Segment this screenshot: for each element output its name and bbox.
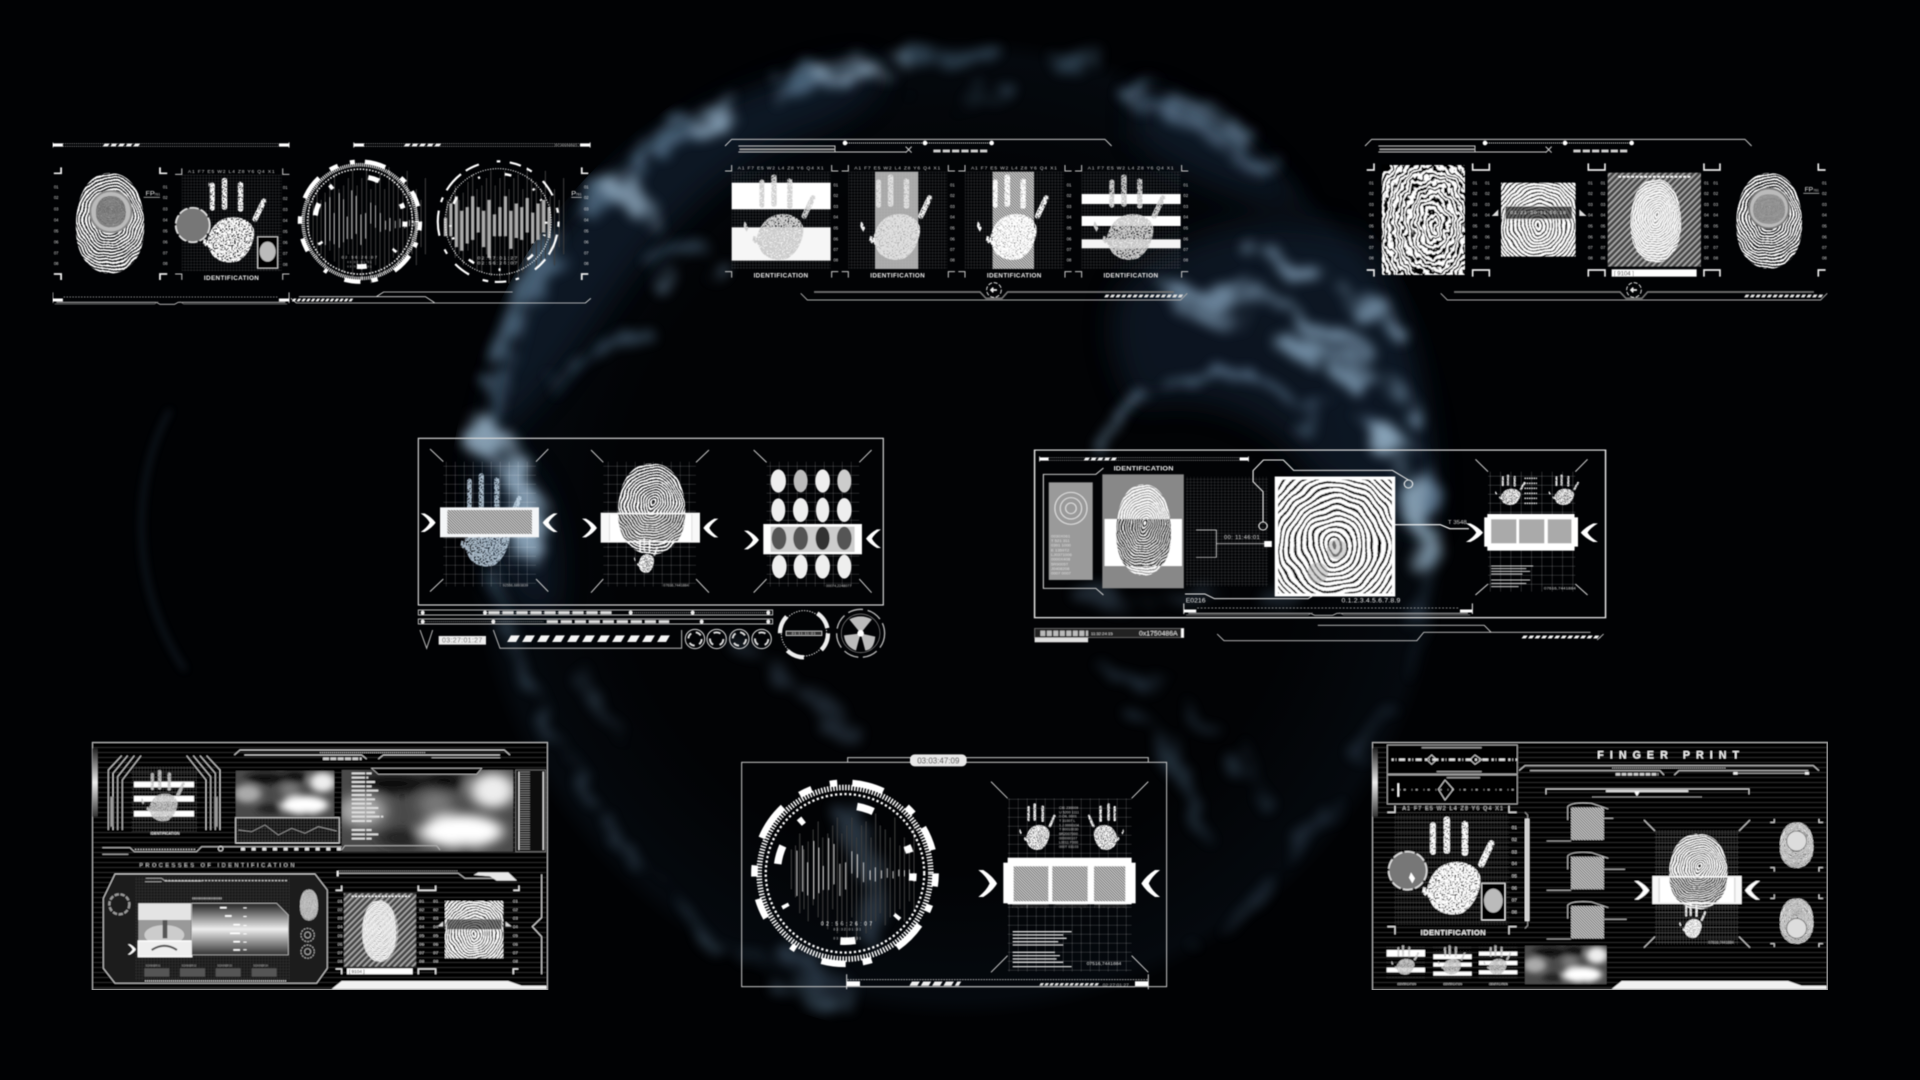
number columns [1369,180,1827,261]
scanner: palm: 92556,6893839 [503,584,528,588]
panel: processes of identification [92,742,548,990]
image panel [1523,946,1607,986]
fingerprint with lens: FP [1805,186,1814,193]
mini palm cells [1387,944,1517,986]
heading: IDENTIFICATION [1114,466,1174,472]
top frame [1365,139,1752,153]
scanner cell: 07616,7441884 [1544,586,1576,590]
waveform ring 1: 02:56:26:07 [341,255,378,260]
glow edge [92,748,98,817]
print with readout [1482,169,1594,283]
waveform ring 1 [300,162,425,283]
scanner: fingerprint: 07616,7441884 [663,584,689,588]
radiation dial [837,609,885,657]
scanner cell: 0 OIL 0001 [1059,815,1077,819]
palm identification [1387,806,1517,937]
scanner cell: 07616,7441884 [1708,940,1734,944]
scanner: palm [421,449,558,592]
circuit trace [1253,460,1413,530]
frame [742,762,1167,987]
data panel: 0007 0007 [1051,571,1071,576]
vertical slider [1525,812,1529,928]
palm badge with circuit lines: IDENTIFICATION [150,831,180,835]
swirl print [1375,137,1492,313]
scanner cell: L0011 F000 [1059,841,1078,845]
side bracket [532,874,542,974]
data panel: 0000X408 [1051,557,1071,562]
scanner cell: 000000107 [1059,836,1077,840]
palm identification cell: K1 [208,183,215,189]
scanner cell: 6R2007000 [1059,832,1078,836]
data panel: 0391 1000 [1051,543,1072,548]
data panel: 0030X061 [1051,534,1070,538]
readout strip: 11:32:24:15 [1091,631,1114,636]
data panel: 5R9005T [1051,562,1069,566]
panel: identification with large whorl [1035,450,1606,642]
palm badge with circuit lines [108,756,220,835]
bottom bars [53,292,591,304]
time pill [848,754,1148,766]
image panel large [338,768,515,854]
small whorl [430,890,518,978]
device: SCANNER 02 [182,965,197,968]
bottom bar [1184,603,1472,615]
number columns [54,184,589,267]
waveform ring 2 [438,161,564,283]
print on grey with white band [1102,472,1184,588]
panel ground with scan lines [92,742,548,990]
hatched print [344,892,416,974]
cell 3: hatched band [958,165,1072,280]
scanner: fingerprint [582,450,718,593]
readout strip [1035,628,1184,642]
scanner cell: U 5200 1111 [1059,810,1079,814]
outer frame [418,438,883,605]
title: FINGER PRINT [1597,750,1739,762]
corner brackets [54,167,588,280]
continent streaks [473,51,1439,1006]
data panel: E 1359T2 [1051,548,1069,552]
bottom bar: 02:27:01:27 [1103,982,1129,988]
device: SCANNER 03 [217,965,233,968]
top right decoration [338,871,517,881]
waveform ring 1: 03:56:05:01 [347,265,373,268]
bottom frame [1441,283,1827,300]
mini palm cells: IDENTIFICATION [1397,983,1416,986]
glow edge [1372,748,1378,817]
title frame [1519,766,1819,775]
grid and timer [1186,477,1272,587]
footer labels: 0.1.2.3.4.5.6.7.8.9 [1341,598,1401,604]
outer frame [1035,450,1606,618]
small round buttons [685,629,771,649]
FP label right: 761 [576,192,582,196]
scanner cell: 07516,7441884 [1087,961,1122,967]
top frame [725,139,1112,153]
panel: waveform and palm scan [742,754,1167,989]
panel: finger print [1372,742,1828,990]
land masses base [473,62,1433,613]
device: SCANNER 04 [253,965,269,968]
scanner: fingertip array: 00074,2248077 [826,584,851,588]
brackets [1367,163,1826,277]
cell 4: three stripes [1075,165,1189,280]
side gauge [516,770,546,852]
data panel [1043,468,1103,595]
readout strip: 0x1750486A [1139,631,1178,638]
palm identification cell [175,168,289,282]
device: SCANNER 01 [146,965,161,968]
hatched print: [ 9104 ] [1614,271,1634,277]
whorl tiles [1547,803,1627,939]
FP label right: P [571,191,576,197]
heading: PROCESSES OF IDENTIFICATION [139,863,294,869]
mini palm cells: IDENTIFICATION [1443,983,1462,986]
bottom bar [847,974,1148,989]
fingerprint with lens [1721,160,1819,270]
top bar [1040,456,1248,462]
scanner cell [1466,459,1598,595]
scanner cell: T 31007 L [1059,819,1075,823]
hatched print [1608,168,1701,277]
palm identification: IDENTIFICATION [1421,928,1486,937]
slash row [509,629,674,649]
scanner cell [978,782,1160,972]
footer labels: E0216 [1186,598,1206,605]
FP label right [571,191,582,197]
scanner cell: 1 J 0000104 [1059,823,1079,827]
small lens prints [1770,816,1823,947]
timer dial: 01:11:11:01 [792,632,816,636]
bottom white plate [332,981,547,989]
connector to scanner [1394,520,1469,529]
fingerprint with lens: 761 [154,192,160,196]
top bars: SCANNING [554,143,577,148]
footer labels [1185,594,1401,605]
data panel: T 521 311 [1051,538,1070,543]
fingerprint with lens: 761 [1813,188,1819,192]
waveform ring [754,783,936,964]
palm identification: A1 F7 E5 W2 L4 Z8 Y6 Q4 X1 [1402,806,1503,812]
data panel: LJ0371006 [1051,552,1073,557]
waveform boxes [1387,745,1517,804]
foreground [53,137,1828,990]
grid and timer: 00: 11:46:01 [1224,535,1260,541]
waveform ring: 03:32:01:01 [833,928,862,932]
scanner: fingertip array [744,450,881,593]
timer dial [780,609,828,657]
print with readout: 01:21:30:11:56:18 [1510,210,1567,216]
hatched print: [ 9104 ] [349,969,365,974]
fingerprint with lens [59,159,161,275]
large whorl [1246,455,1424,637]
cell 1: two horizontal bands [725,165,839,280]
scanner cell [1634,820,1760,948]
divider dots [102,846,440,854]
timecode [420,630,682,648]
bottom white plate [1612,981,1827,989]
scanner cell: CIE 230009 [1059,806,1078,810]
waveform ring: 02:56:26:07 [821,921,875,927]
scanner cell: T 00010030 [1059,828,1078,832]
waveform ring: 03:56:05:01 [833,936,862,940]
fingerprint with lens: FP [145,191,155,197]
device [103,874,327,983]
waveform ring 1: 03:02:01:01 [347,261,373,264]
top bars [53,142,590,148]
time pill: 03:03:47:09 [917,756,960,765]
slider bars [418,610,773,624]
faint stray arc left [142,410,185,670]
cell 2: vertical band [842,165,955,280]
panel: whorl fingerprint series [1365,137,1827,313]
timecode: 03:27:01:27 [442,638,483,645]
bottom frame [801,283,1187,300]
globe [466,36,1449,1019]
connector to scanner: T 3548 [1448,520,1467,526]
waveform ring 2: 02:27:01:27 [478,255,519,261]
waveform ring 2: 02:56:26:07 [478,261,519,267]
mini palm cells: IDENTIFICATION [1489,983,1508,986]
wave box [236,818,339,843]
top right frame [234,750,510,759]
panel: fingerprint, palm and waveform scanners [53,142,591,304]
range bracket [1546,789,1749,797]
image panel small [234,771,335,818]
panel: four palm identification cells [725,139,1189,300]
brackets and numbers [336,886,519,974]
panel ground with scan lines [1372,742,1828,990]
lower right lines [1217,625,1604,641]
panel: three scanner cells [418,438,885,657]
data panel: J0408208 [1051,566,1070,571]
scanner cell: 000T 03103 [1059,845,1078,849]
